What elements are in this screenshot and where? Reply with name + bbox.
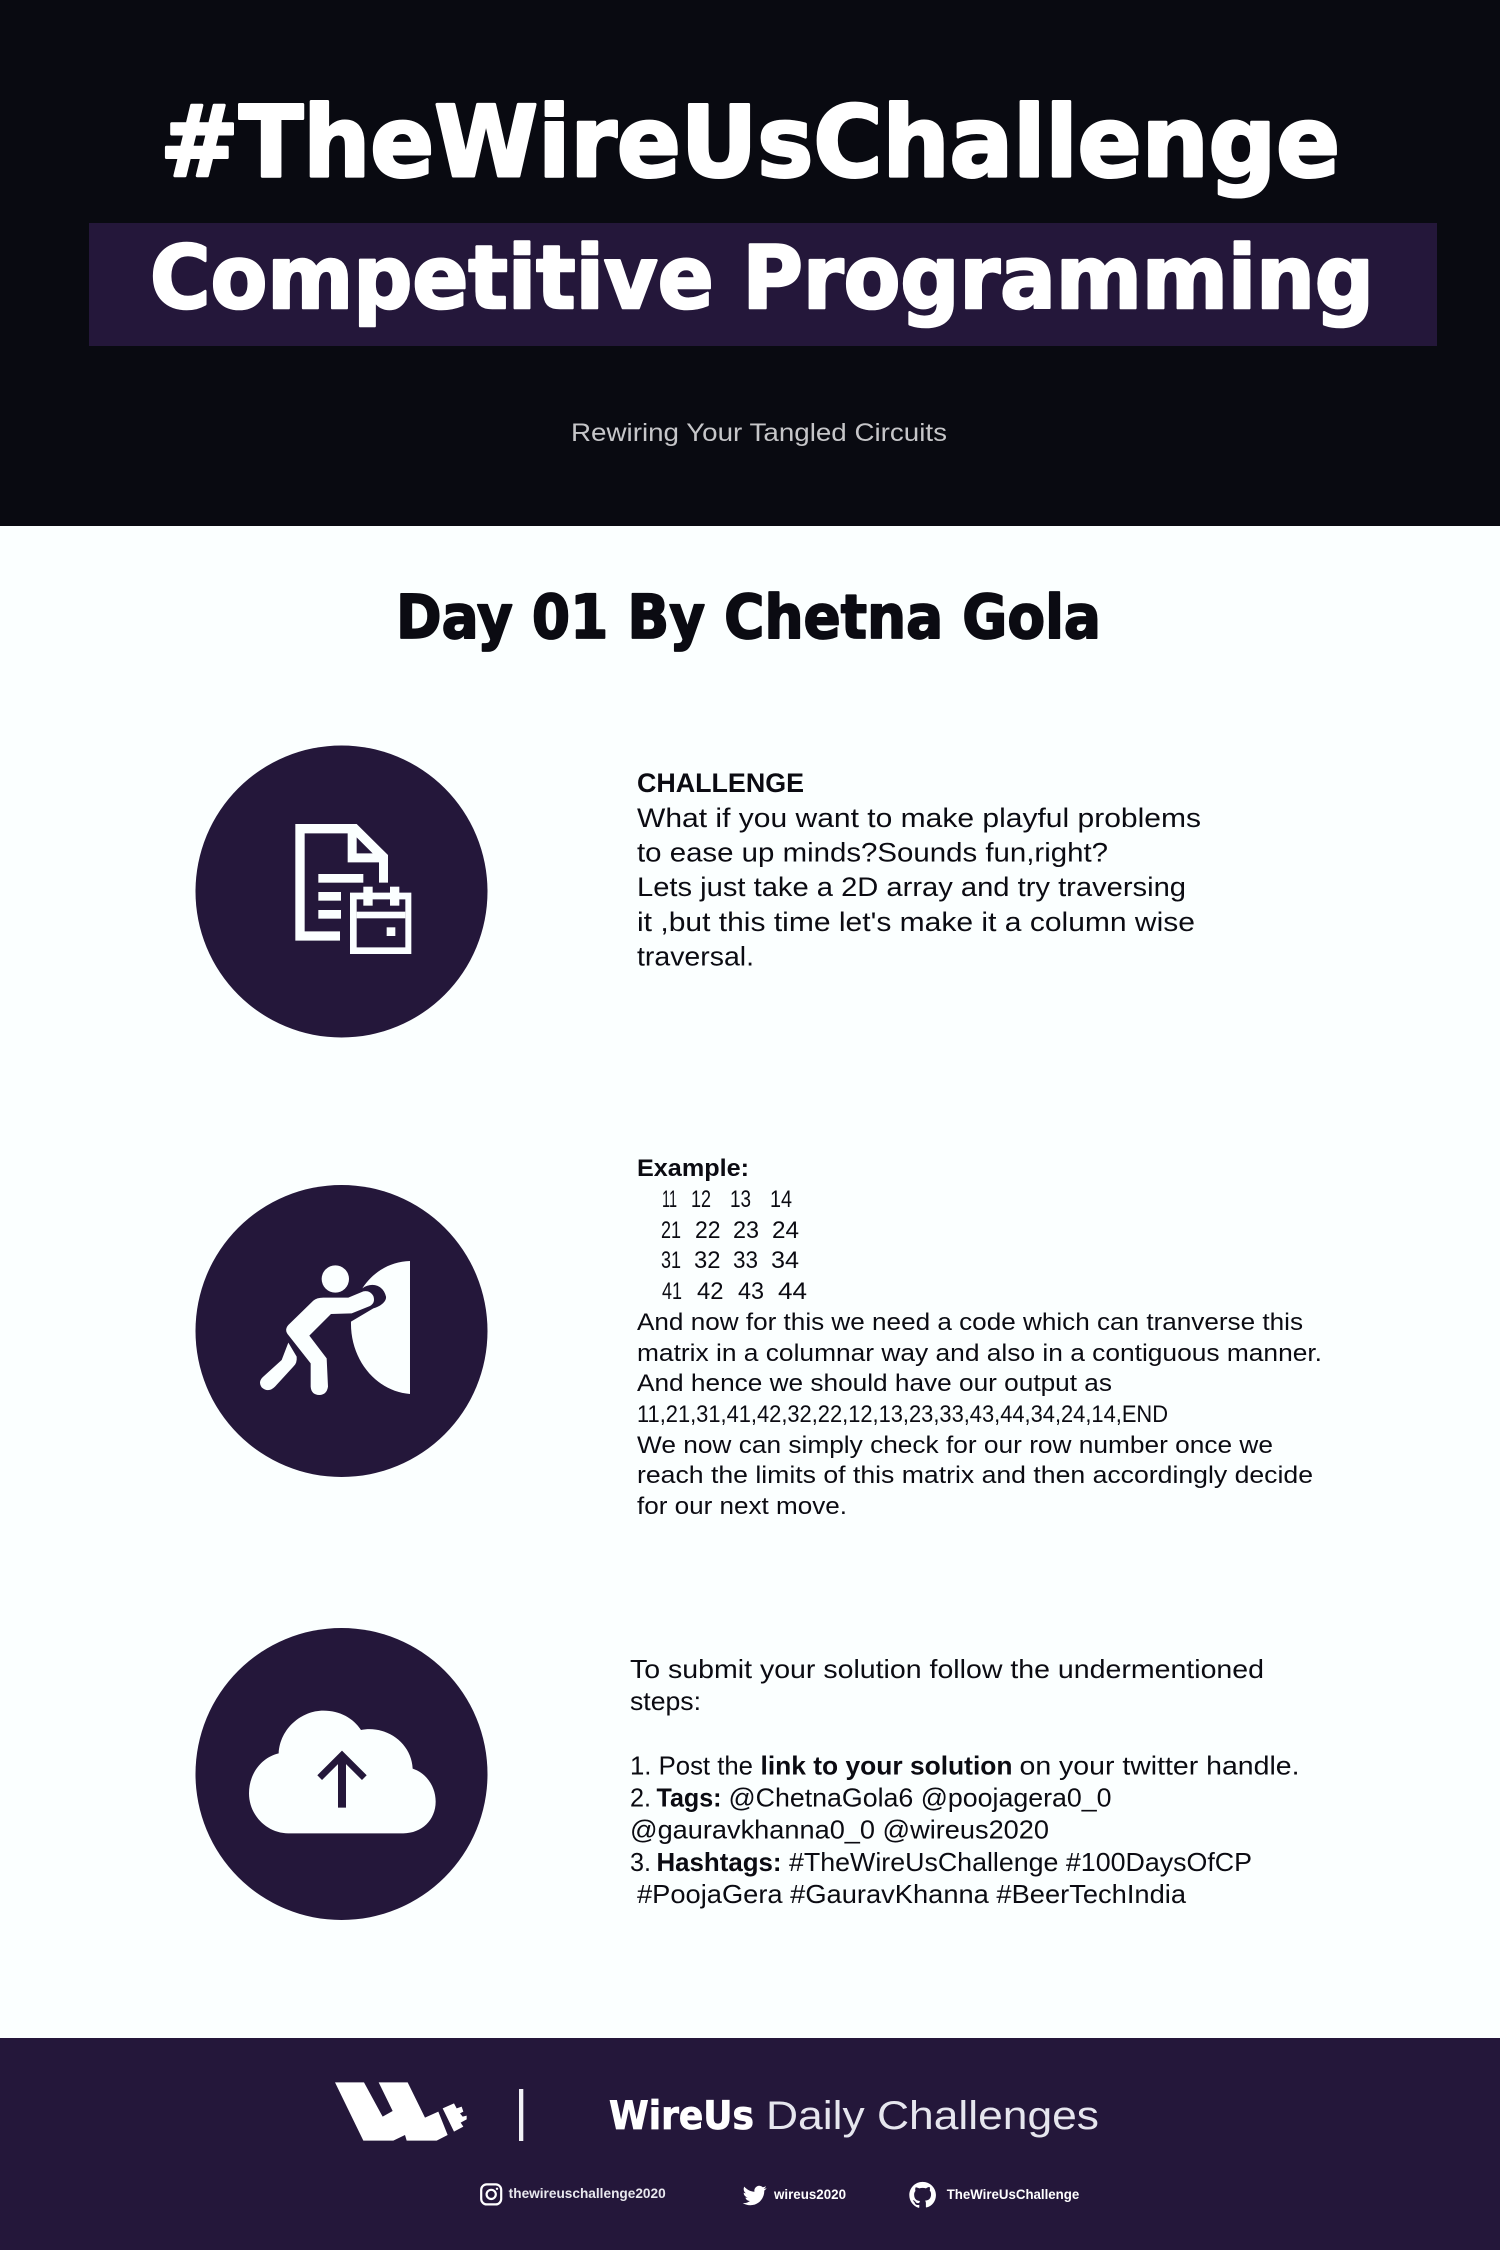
day heading: Day 01 By Chetna Gola [396,582,1101,653]
challenge text block: What if you want to make playful problems [637,803,1201,833]
matrix: 43 [738,1278,764,1305]
matrix: 22 [695,1217,720,1244]
icon: cloud upload [196,1628,488,1920]
matrix: 41 [662,1278,682,1305]
challenge text block: to ease up minds?Sounds fun,right? [637,838,1108,868]
submission steps text block: steps: [630,1686,701,1716]
social: github: TheWireUsChallenge [947,2187,1080,2202]
matrix [661,1186,807,1305]
matrix: 33 [733,1247,758,1274]
icon: WireUs logo [335,2082,467,2141]
subtitle band: Competitive Programming [150,227,1374,329]
challenge text block: traversal. [637,942,754,972]
matrix: 34 [771,1247,799,1274]
matrix: 31 [661,1247,681,1274]
header panel [0,0,1500,526]
example text block [637,1155,1322,1520]
divider [519,2089,523,2141]
example text block: 11,21,31,41,42,32,22,12,13,23,33,43,44,34,24,14,END [637,1401,1168,1428]
footer title [609,2094,1099,2139]
social: github [909,2182,1080,2208]
submission steps text block: #TheWireUsChallenge #100DaysOfCP [789,1847,1252,1877]
submission steps text block: Tags: [656,1782,722,1812]
title: #TheWireUsChallenge [160,86,1340,200]
submission steps text block: on your twitter handle. [1020,1750,1300,1780]
social: instagram [481,2184,666,2204]
matrix: 32 [694,1247,720,1274]
social: twitter [743,2186,846,2205]
example text block: matrix in a columnar way and also in a contiguous manner. [637,1340,1322,1367]
matrix: 24 [772,1217,799,1244]
example text block: reach the limits of this matrix and then accordingly decide [637,1462,1313,1489]
example text block: We now can simply check for our row number once we [637,1432,1273,1459]
challenge text block: it ,but this time let's make it a column wise [637,907,1195,937]
social: twitter: wireus2020 [773,2187,846,2202]
matrix: 42 [697,1278,724,1305]
footer title: Daily Challenges [766,2094,1099,2138]
icon: document with calendar [196,746,488,1038]
submission steps text block: @ChetnaGola6 @poojagera0_0 [728,1782,1112,1812]
footer panel [0,2038,1500,2250]
submission steps text block: 2. [630,1782,651,1812]
challenge text block: Lets just take a 2D array and try traversing [637,872,1186,902]
example text block: Example: [637,1155,749,1182]
example text block: for our next move. [637,1493,847,1520]
submission steps text block: @gauravkhanna0_0 @wireus2020 [630,1814,1049,1844]
challenge text block: CHALLENGE [637,768,804,798]
submission steps text block: To submit your solution follow the undermentioned [630,1654,1264,1684]
social: instagram: thewireuschallenge2020 [509,2186,666,2201]
submission steps text block: #PoojaGera #GauravKhanna #BeerTechIndia [637,1879,1187,1909]
tagline: Rewiring Your Tangled Circuits [571,419,947,447]
submission steps text block: 3. [630,1847,651,1877]
matrix: 23 [733,1217,759,1244]
footer title: WireUs [609,2094,754,2139]
submission steps text block [630,1654,1300,1909]
matrix: 11 [662,1186,677,1213]
matrix: 14 [770,1186,792,1213]
submission steps text block: 1. Post the [630,1750,753,1780]
example text block: And hence we should have our output as [637,1370,1112,1397]
submission steps text block: Hashtags: [656,1847,782,1877]
matrix: 44 [778,1278,807,1305]
icon: person pushing boulder [196,1185,488,1477]
matrix: 21 [661,1217,681,1244]
submission steps text block: link to your solution [760,1750,1012,1780]
challenge text block [637,768,1201,972]
example text block: And now for this we need a code which can tranverse this [637,1309,1303,1336]
matrix: 13 [730,1186,751,1213]
matrix: 12 [691,1186,711,1213]
